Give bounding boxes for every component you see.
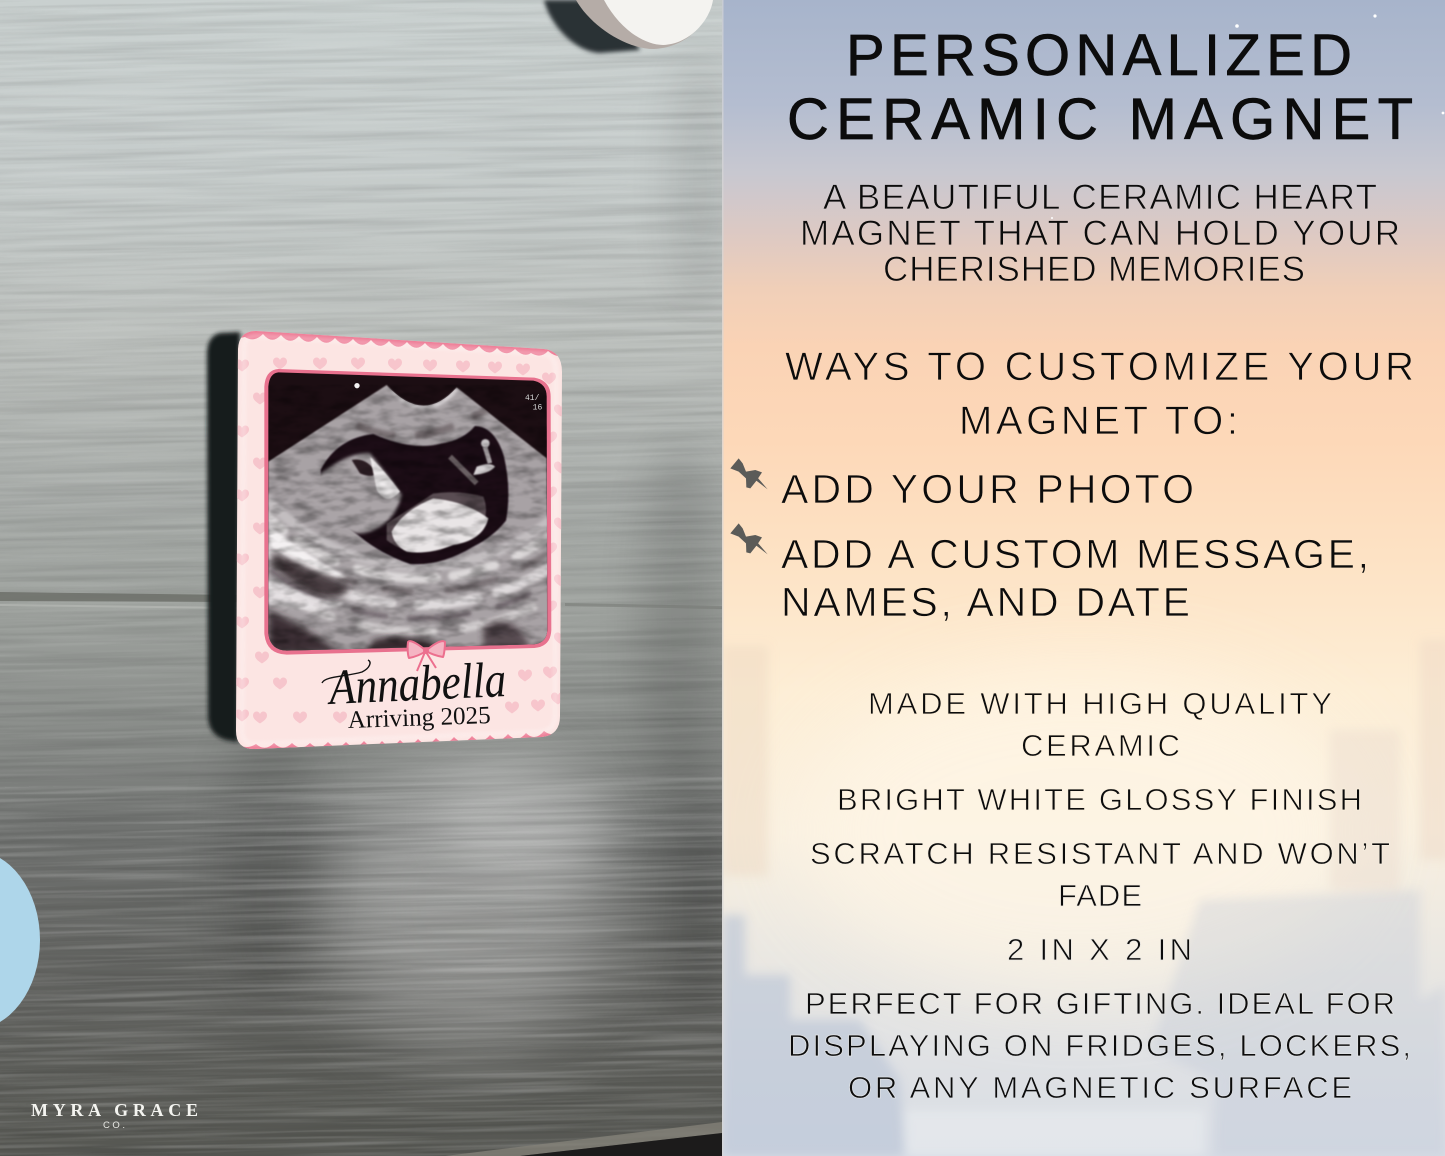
subtitle: MAGNET THAT CAN HOLD YOUR — [800, 214, 1400, 253]
product features: OR ANY MAGNETIC SURFACE — [848, 1070, 1352, 1105]
magnet name text — [321, 659, 504, 704]
ultrasound photo: 41/ — [525, 394, 540, 403]
top scallop border — [240, 329, 565, 356]
customization options: NAMES, AND DATE — [781, 579, 1190, 625]
customize heading — [785, 345, 1414, 443]
product features: BRIGHT WHITE GLOSSY FINISH — [837, 782, 1362, 817]
round white magnet — [544, 0, 713, 53]
brand logo: CO. — [103, 1120, 125, 1131]
round blue magnet — [0, 850, 40, 1030]
ultrasound scan fan — [268, 385, 548, 653]
subtitle: CHERISHED MEMORIES — [883, 250, 1305, 289]
magnet shadow — [207, 332, 240, 742]
product features: SCRATCH RESISTANT AND WON’T — [810, 836, 1390, 871]
product features: PERFECT FOR GIFTING. IDEAL FOR — [805, 986, 1395, 1021]
product features: 2 IN X 2 IN — [1007, 932, 1192, 967]
amniotic sac — [321, 426, 508, 564]
icon: push pin 2 — [730, 523, 768, 554]
sky stars — [1016, 14, 1444, 219]
panel: watercolor city sky background — [722, 0, 1445, 1156]
brand logo: MYRA GRACE — [31, 1100, 198, 1120]
fridge panel seam — [0, 592, 210, 602]
embryo head and body — [312, 453, 402, 533]
left edge of text panel — [722, 0, 724, 1156]
product features: MADE WITH HIGH QUALITY — [868, 686, 1332, 721]
icon: push pin 1 — [730, 458, 768, 489]
tissue arcs — [268, 388, 548, 637]
product features: FADE — [1058, 878, 1142, 913]
bottom fridge edge highlight — [445, 1122, 722, 1156]
ultrasound photo — [268, 372, 548, 651]
magnet date text: Arriving 2025 — [347, 702, 491, 734]
photo frame — [264, 369, 551, 655]
product features: CERAMIC — [1021, 728, 1180, 763]
subtitle: A BEAUTIFUL CERAMIC HEART — [823, 178, 1377, 217]
customize heading: WAYS TO CUSTOMIZE YOUR — [785, 345, 1414, 389]
subtitle — [800, 178, 1400, 289]
customize heading: MAGNET TO: — [959, 399, 1238, 443]
title: CERAMIC MAGNET — [787, 87, 1413, 152]
bottom fridge edge — [520, 1133, 722, 1156]
gloss highlight on magnet edges — [242, 336, 556, 744]
ceramic magnet — [236, 331, 562, 749]
title — [787, 23, 1413, 152]
ultrasound photo: 16 — [533, 403, 542, 412]
embryo bright body — [392, 498, 488, 552]
customization options: ADD A CUSTOM MESSAGE, — [781, 531, 1369, 577]
bottom scallop border — [242, 731, 552, 749]
magnet name text: Annabella — [325, 651, 507, 715]
customization options — [781, 466, 1369, 625]
product features: DISPLAYING ON FRIDGES, LOCKERS, — [788, 1028, 1411, 1063]
customization options: ADD YOUR PHOTO — [781, 466, 1194, 512]
brand logo — [31, 1104, 198, 1128]
panel: stainless steel fridge photo — [0, 0, 773, 1156]
heart pattern — [235, 357, 568, 724]
product features — [788, 686, 1411, 1105]
title: PERSONALIZED — [846, 23, 1352, 88]
scan speckle — [268, 385, 548, 653]
pink bow — [408, 641, 445, 671]
